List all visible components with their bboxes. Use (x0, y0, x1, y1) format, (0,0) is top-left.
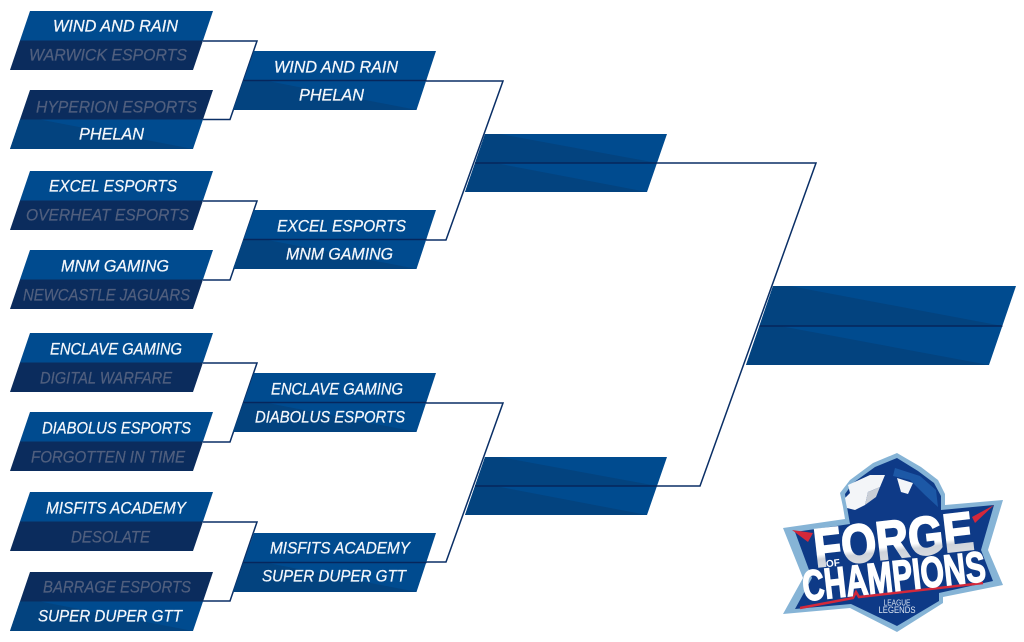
quarterfinal 1: PHELAN (299, 86, 365, 104)
match 4: MnM Gaming vs Newcastle Jaguars: NEWCASTLE JAGUARS (23, 286, 191, 304)
red lightning line (800, 583, 983, 608)
quarterfinal 3 (233, 373, 436, 432)
match 1: Wind and Rain vs Warwick Esports (10, 11, 213, 70)
match 8: Barrage Esports vs Super Duper GTT: SUPER DUPER GTT (38, 606, 183, 626)
match 1: Wind and Rain vs Warwick Esports: WIND AND RAIN (53, 16, 179, 36)
match 4: MnM Gaming vs Newcastle Jaguars (10, 250, 213, 309)
logo badge outline (783, 453, 1003, 632)
match 6: Diabolus Esports vs Forgotten in Time: DIABOLUS ESPORTS (42, 418, 192, 438)
logo badge fill (795, 458, 994, 626)
logo word: League of Legends: LEGENDS (878, 605, 916, 615)
logo word: FORGE: FORGE (811, 501, 976, 579)
quarterfinal 3: DIABOLUS ESPORTS (255, 408, 406, 426)
connector lines: round 1 to round 2 (203, 41, 257, 601)
match 2: Hyperion Esports vs Phelan: HYPERION ESPORTS (36, 98, 198, 116)
match 5: Enclave Gaming vs Digital Warfare: DIGITAL WARFARE (40, 368, 173, 388)
quarterfinal 4: SUPER DUPER GTT (262, 566, 407, 586)
lion muzzle shadow (865, 487, 880, 505)
match 3: Excel Esports vs Overheat Esports: OVERHEAT ESPORTS (26, 206, 190, 224)
match 8: Barrage Esports vs Super Duper GTT (10, 572, 213, 631)
match 5: Enclave Gaming vs Digital Warfare (10, 333, 213, 392)
match 4: MnM Gaming vs Newcastle Jaguars: MNM GAMING (61, 256, 169, 276)
lion face (845, 475, 885, 510)
quarterfinal 2 (233, 210, 436, 269)
red accent right (972, 505, 994, 523)
semifinal 2 (empty) (465, 457, 667, 515)
match 6: Diabolus Esports vs Forgotten in Time: FORGOTTEN IN TIME (31, 448, 186, 466)
quarterfinal 4 (233, 533, 436, 592)
match 7: Misfits Academy vs Desolate: DESOLATE (71, 528, 151, 546)
quarterfinal 2: MNM GAMING (286, 244, 393, 264)
match 6: Diabolus Esports vs Forgotten in Time (10, 412, 213, 471)
connector lines: round 2 to semifinals (426, 81, 503, 562)
match 1: Wind and Rain vs Warwick Esports: WARWICK ESPORTS (29, 46, 188, 64)
logo word: League of Legends (878, 598, 916, 615)
connector lines: semifinals to final (657, 163, 816, 486)
red accent left (792, 530, 813, 542)
match 2: Hyperion Esports vs Phelan: PHELAN (79, 124, 145, 144)
final (empty) (746, 286, 1016, 365)
lion mane highlight (893, 468, 938, 507)
quarterfinal 3: ENCLAVE GAMING (271, 380, 403, 398)
match 7: Misfits Academy vs Desolate (10, 492, 213, 551)
quarterfinal 1 (233, 51, 436, 110)
match 3: Excel Esports vs Overheat Esports: EXCEL ESPORTS (49, 176, 178, 196)
quarterfinal 4: MISFITS ACADEMY (270, 538, 411, 558)
match 3: Excel Esports vs Overheat Esports (10, 171, 213, 230)
quarterfinal 1: WIND AND RAIN (274, 58, 399, 76)
logo word: OF: OF (825, 558, 841, 570)
match 5: Enclave Gaming vs Digital Warfare: ENCLAVE GAMING (50, 340, 182, 358)
logo word: League of Legends: LEAGUE (884, 598, 910, 608)
semifinal 1 (empty) (465, 134, 667, 192)
match 2: Hyperion Esports vs Phelan (10, 90, 213, 149)
logo: Forge of Champions (783, 453, 1003, 632)
match 8: Barrage Esports vs Super Duper GTT: BARRAGE ESPORTS (43, 578, 192, 596)
quarterfinal 2: EXCEL ESPORTS (277, 216, 407, 236)
lion ear (897, 478, 913, 494)
match 7: Misfits Academy vs Desolate: MISFITS ACADEMY (46, 498, 187, 518)
